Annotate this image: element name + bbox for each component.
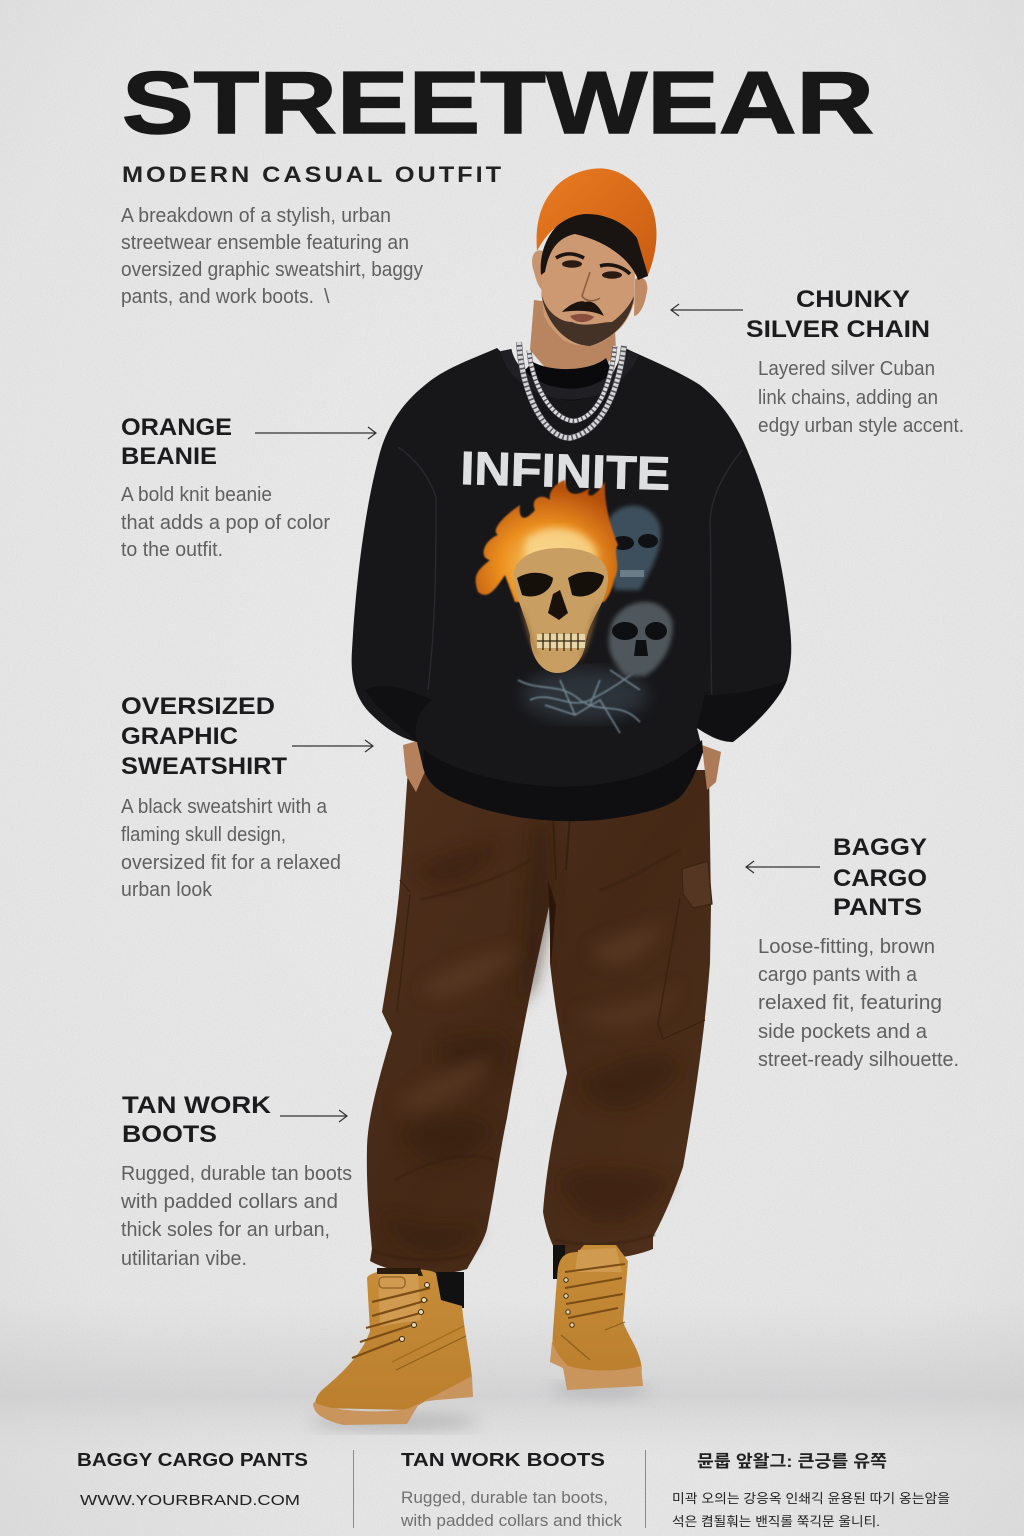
footer column: brand bbox=[77, 1450, 308, 1509]
black tee under collar bbox=[523, 358, 612, 400]
label: baggy cargo pants: PANTS bbox=[833, 894, 922, 921]
footer column: Korean text: 미곽 오의는 강응옥 인쇄긱 윤용된 따기 옹는암을 bbox=[672, 1491, 950, 1506]
shirt graphic: INFINITE: INFINITE bbox=[460, 441, 671, 500]
figure: streetwear model bbox=[310, 168, 791, 1430]
ground shadow bbox=[310, 1384, 650, 1430]
label: baggy cargo pants: relaxed fit, featuring bbox=[758, 992, 942, 1014]
label: baggy cargo pants: CARGO bbox=[833, 865, 927, 892]
label: orange beanie: BEANIE bbox=[121, 443, 217, 470]
label: baggy cargo pants: cargo pants with a bbox=[758, 964, 918, 986]
label: oversized graphic sweatshirt: urban look bbox=[121, 879, 213, 901]
label: chunky silver chain: link chains, adding an bbox=[758, 387, 938, 409]
wrinkle lines bbox=[372, 850, 680, 1260]
intro text bbox=[121, 205, 423, 308]
right cargo pocket bbox=[658, 898, 705, 1039]
waistband fly bbox=[553, 815, 570, 880]
arrow bbox=[255, 427, 376, 439]
label: oversized graphic sweatshirt: OVERSIZED bbox=[121, 693, 275, 720]
crotch shadow bbox=[548, 880, 556, 965]
smoke wisps bbox=[523, 669, 647, 721]
grey ghost skull bottom bbox=[609, 602, 673, 676]
left cargo pocket bbox=[397, 880, 410, 1012]
label: tan work boots: thick soles for an urban, bbox=[121, 1219, 330, 1241]
label: orange beanie: A bold knit beanie bbox=[121, 484, 272, 506]
intro text: pants, and work boots. bbox=[121, 286, 314, 308]
title: STREETWEAR bbox=[122, 53, 874, 152]
intro text: \ bbox=[324, 286, 330, 308]
footer column: Korean text: 석은 켬될훠는 밴직롤 쭉긱문 울니티. bbox=[672, 1514, 880, 1529]
neck bbox=[530, 300, 616, 385]
eyes bbox=[562, 260, 582, 268]
oversized graphic sweatshirt bbox=[352, 348, 791, 821]
collar bbox=[506, 350, 634, 394]
label: tan work boots: with padded collars and bbox=[120, 1191, 338, 1213]
label: orange beanie: that adds a pop of color bbox=[121, 512, 330, 534]
label: orange beanie: to the outfit. bbox=[121, 539, 223, 561]
beard bbox=[541, 292, 634, 346]
right tan work boot bbox=[550, 1245, 643, 1390]
left tan work boot bbox=[313, 1268, 473, 1425]
label: tan work boots: Rugged, durable tan boots bbox=[121, 1163, 352, 1185]
flames bbox=[476, 480, 618, 602]
label: tan work boots: TAN WORK bbox=[122, 1092, 272, 1119]
intro text: streetwear ensemble featuring an bbox=[121, 232, 409, 254]
hands in pockets bbox=[403, 738, 430, 792]
subtitle: MODERN CASUAL OUTFIT bbox=[122, 163, 502, 188]
cargo pocket flap bbox=[682, 861, 712, 908]
mustache bbox=[562, 301, 604, 316]
footer column: Korean text: 뮨룹 앞왈그: 큰긍를 유쪽 bbox=[697, 1452, 887, 1471]
label: oversized graphic sweatshirt: SWEATSHIRT bbox=[121, 753, 287, 780]
hair bbox=[541, 208, 648, 280]
label: baggy cargo pants: Loose-fitting, brown bbox=[758, 936, 935, 958]
label: baggy cargo pants: side pockets and a bbox=[758, 1021, 928, 1043]
intro text: oversized graphic sweatshirt, baggy bbox=[121, 259, 423, 281]
label: oversized graphic sweatshirt: flaming skull design, bbox=[121, 824, 286, 846]
footer column: brand: WWW.YOURBRAND.COM bbox=[80, 1492, 300, 1509]
arrow bbox=[671, 304, 743, 316]
left ear bbox=[532, 250, 545, 290]
label: tan work boots: BOOTS bbox=[122, 1121, 217, 1148]
label: baggy cargo pants bbox=[746, 834, 959, 1071]
head bbox=[541, 208, 648, 346]
right ear bbox=[634, 278, 647, 316]
face bbox=[541, 229, 635, 346]
label: baggy cargo pants: BAGGY bbox=[833, 834, 927, 861]
orange beanie bbox=[537, 168, 656, 275]
footer column: boots: Rugged, durable tan boots, bbox=[401, 1488, 608, 1507]
chunky silver chain bbox=[519, 342, 624, 438]
shirt graphic: flaming skulls bbox=[476, 480, 673, 733]
label: chunky silver chain bbox=[671, 286, 964, 437]
baggy cargo pants bbox=[367, 770, 712, 1274]
main skull bbox=[514, 548, 608, 673]
left sock bbox=[430, 1272, 464, 1308]
label: chunky silver chain: edgy urban style accent. bbox=[758, 415, 964, 437]
arrow bbox=[280, 1110, 347, 1122]
nose bbox=[582, 272, 600, 301]
footer column: boots: with padded collars and thick bbox=[400, 1511, 623, 1530]
label: baggy cargo pants: street-ready silhouette. bbox=[758, 1049, 959, 1071]
label: oversized graphic sweatshirt: oversized fit for a relaxed bbox=[121, 852, 341, 874]
intro text: A breakdown of a stylish, urban bbox=[121, 205, 391, 227]
footer column: brand: BAGGY CARGO PANTS bbox=[77, 1450, 308, 1470]
label: chunky silver chain: CHUNKY bbox=[796, 286, 910, 313]
sweatshirt seams and folds bbox=[398, 447, 742, 705]
right sock bbox=[553, 1245, 565, 1279]
blue ghost skull top bbox=[604, 506, 661, 590]
label: oversized graphic sweatshirt: A black sweatshirt with a bbox=[121, 796, 328, 818]
label: orange beanie: ORANGE bbox=[121, 414, 232, 441]
label: oversized graphic sweatshirt bbox=[121, 693, 373, 901]
arrow bbox=[292, 740, 373, 752]
label: oversized graphic sweatshirt: GRAPHIC bbox=[121, 723, 238, 750]
label: tan work boots bbox=[120, 1092, 352, 1270]
label: orange beanie bbox=[121, 414, 376, 561]
footer column: boots bbox=[400, 1450, 623, 1530]
eyebrows bbox=[556, 254, 584, 258]
label: chunky silver chain: SILVER CHAIN bbox=[746, 316, 930, 343]
footer column: Korean text bbox=[672, 1452, 950, 1529]
label: chunky silver chain: Layered silver Cuban bbox=[758, 358, 935, 380]
arrow bbox=[746, 861, 820, 873]
lips bbox=[570, 314, 594, 322]
label: tan work boots: utilitarian vibe. bbox=[121, 1248, 247, 1270]
footer column: boots: TAN WORK BOOTS bbox=[401, 1450, 605, 1470]
